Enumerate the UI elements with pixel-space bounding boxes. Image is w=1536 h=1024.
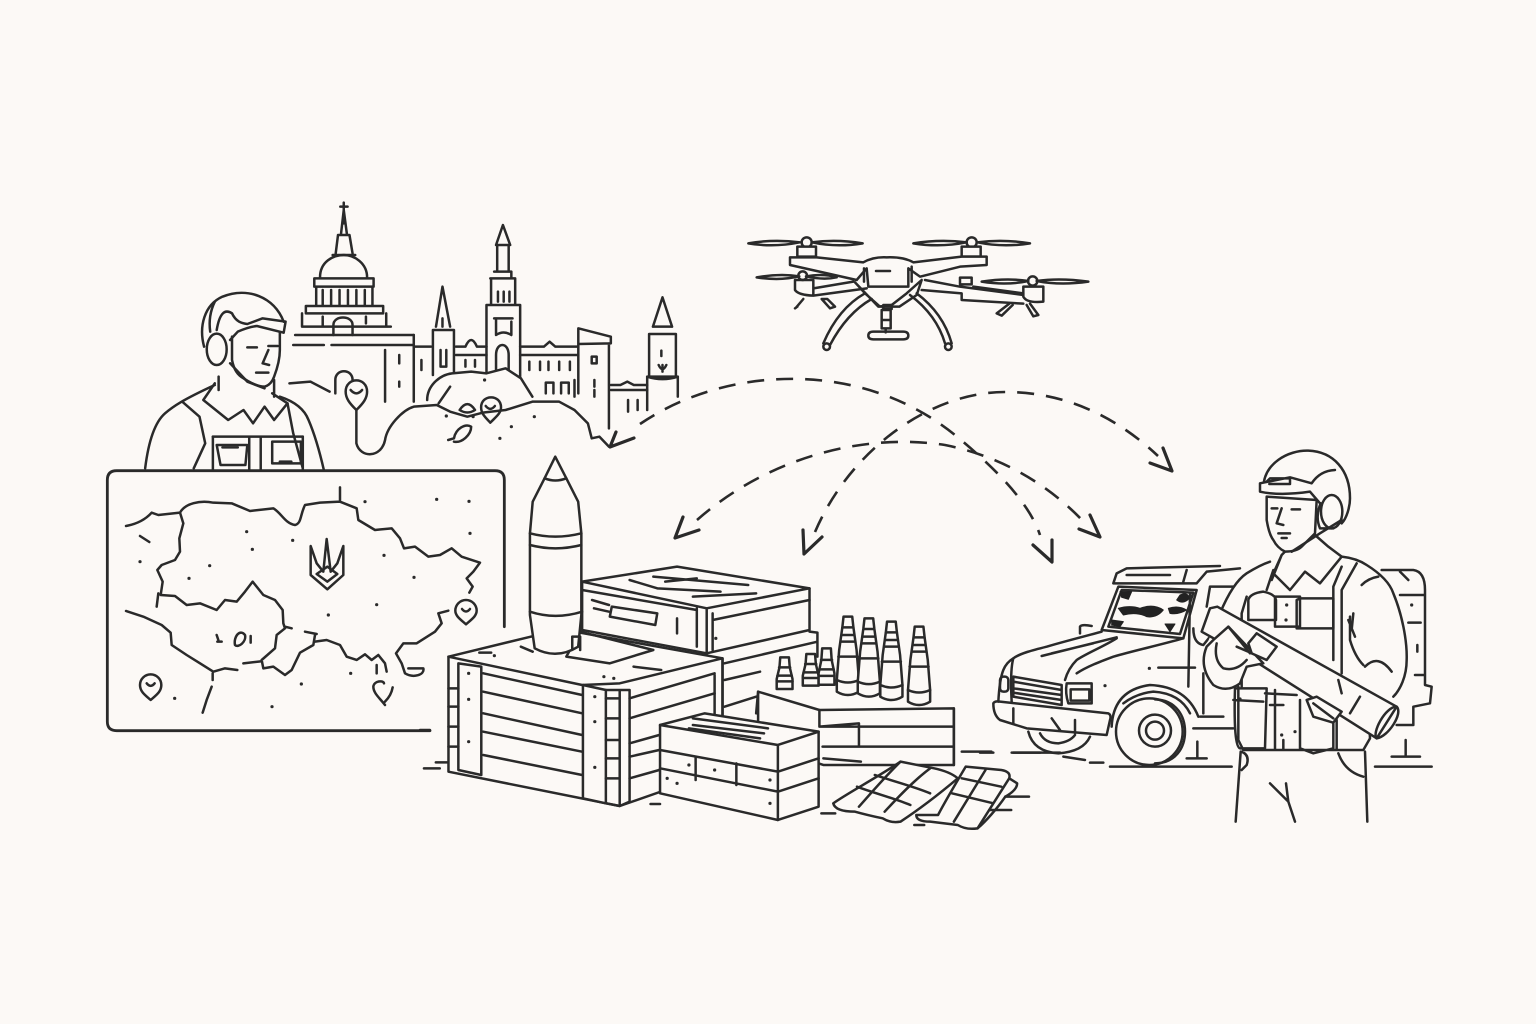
truck: cab and roof [1113, 566, 1240, 583]
crate: large front [448, 632, 723, 806]
soldier: head and helmet [1267, 497, 1317, 552]
truck: hood and front [998, 632, 1183, 702]
arrow: to city [640, 379, 1040, 535]
soldier: torso and arms [1202, 552, 1407, 752]
truck: ground line [980, 740, 1432, 767]
soldier: hands [1204, 627, 1263, 689]
ground marks [420, 730, 1040, 825]
arrow: to crates left [697, 442, 1082, 520]
drone: landing legs and gimbal [855, 280, 922, 307]
soldier holding launcher [1202, 451, 1407, 822]
small shells row [777, 617, 930, 705]
crate: shell box [758, 692, 954, 765]
ration pouches [833, 762, 1017, 829]
ammunition crates and shells [420, 457, 1040, 829]
truck: rear box [1382, 570, 1432, 725]
military truck [980, 566, 1432, 767]
soldier: legs [1235, 752, 1367, 822]
map: location pins [140, 600, 477, 705]
soldier: collar and vest [1272, 535, 1342, 590]
crate: small front [660, 713, 819, 820]
arrowheads [610, 432, 1172, 562]
map: border lines [126, 487, 480, 593]
drone: rear motors [757, 275, 837, 279]
artillery shell [521, 457, 582, 654]
map: trident emblem [311, 539, 343, 589]
truck: windshield marks [1112, 592, 1189, 632]
pilot with headset and tactical vest [145, 293, 324, 470]
drone: front arms and rotors [748, 241, 863, 245]
crate: upper [582, 567, 817, 707]
soldier: launcher tube [1202, 607, 1397, 738]
wall map panel with borders, trident and pins [107, 471, 504, 731]
arrow: to crates right [815, 392, 1158, 532]
dashed delivery arrows [610, 379, 1172, 562]
quadcopter drone [748, 237, 1088, 350]
city skyline with domed capitol and towers [289, 203, 678, 454]
truck: wheel and arch [1112, 685, 1198, 727]
